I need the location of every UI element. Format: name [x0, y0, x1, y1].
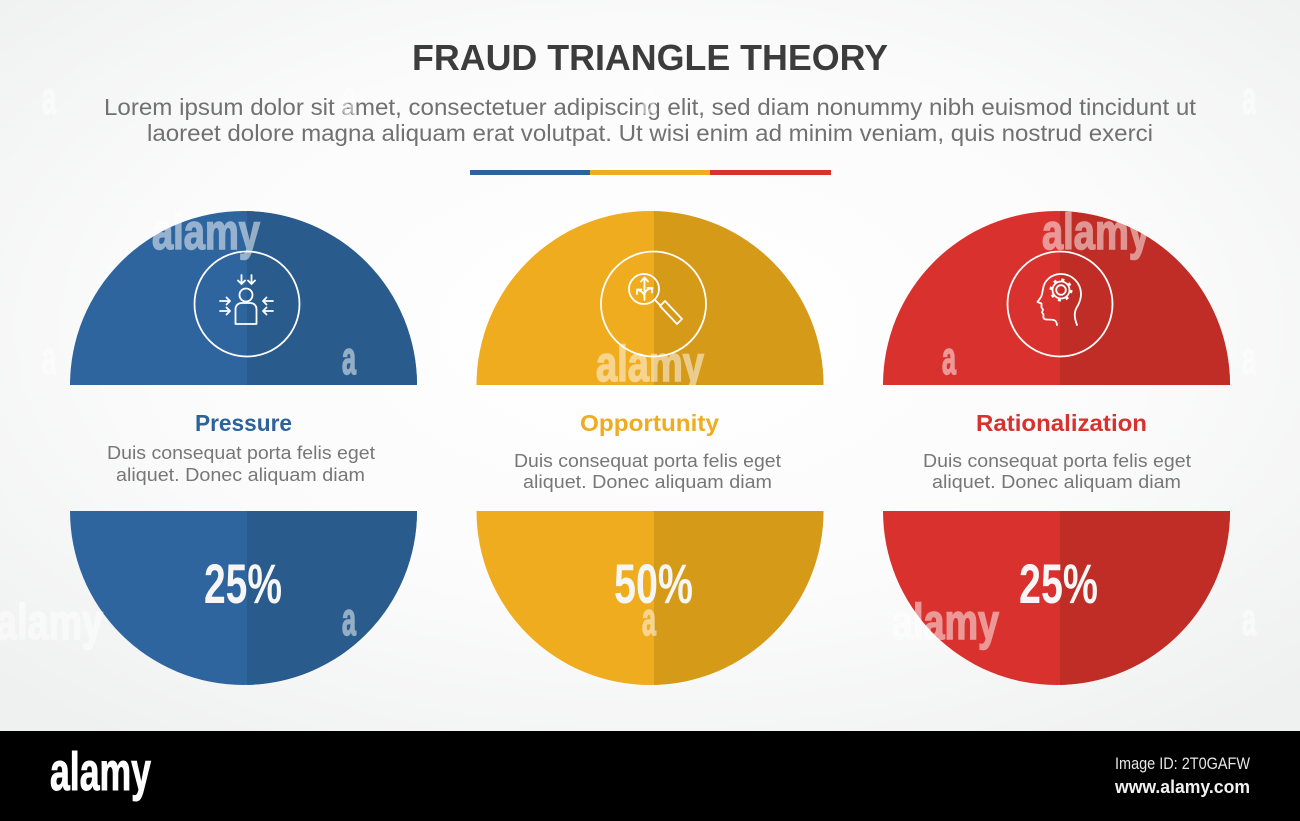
intro text: Lorem ipsum dolor sit amet, consectetuer adipiscing elit, sed diam nonummy nibh euismod tincidunt ut: [104, 94, 1197, 120]
watermarks: a: [42, 332, 56, 384]
watermarks: a: [1242, 593, 1256, 645]
description: pressure: Duis consequat porta felis eget: [107, 443, 375, 463]
description: pressure: aliquet. Donec aliquam diam: [116, 465, 365, 485]
watermarks: a: [1242, 332, 1256, 384]
watermarks: a: [1242, 72, 1256, 124]
top half circle: opportunity: [476, 211, 824, 385]
description: rationalization: Duis consequat porta felis eget: [923, 451, 1191, 471]
bottom half circle: pressure: [70, 511, 417, 685]
watermarks: alamy: [152, 204, 260, 260]
tricolor divider: [470, 170, 831, 175]
image id: Image ID: 2T0GAFW: [1115, 754, 1250, 773]
watermarks: [0, 72, 1256, 650]
intro text: laoreet dolore magna aliquam erat volutpat. Ut wisi enim ad minim veniam, quis nostrud exerci: [147, 120, 1153, 146]
icon: person under pressure: [194, 252, 300, 356]
watermarks: a: [342, 72, 356, 124]
description: rationalization: aliquet. Donec aliquam diam: [932, 472, 1181, 492]
bottom half circle: rationalization: [883, 511, 1230, 685]
top half circle: pressure: [70, 211, 417, 385]
value: 25%: 25%: [1019, 552, 1098, 615]
panel: pressure: [70, 211, 417, 685]
bottom half circle: opportunity: [476, 511, 824, 685]
footer logo: alamy: [50, 742, 151, 802]
title: FRAUD TRIANGLE THEORY: [412, 37, 888, 78]
watermarks: a: [342, 332, 356, 384]
description: opportunity: aliquet. Donec aliquam diam: [523, 472, 772, 492]
value: 50%: 50%: [614, 552, 693, 615]
watermarks: a: [642, 593, 656, 645]
watermarks: a: [942, 332, 956, 384]
heading: rationalization: Rationalization: [976, 410, 1147, 436]
watermarks: alamy: [0, 594, 103, 650]
watermarks: alamy: [596, 336, 704, 392]
description: rationalization: [923, 451, 1191, 492]
description: opportunity: [514, 451, 781, 492]
value: 25%: 25%: [204, 552, 282, 615]
description: pressure: [107, 443, 375, 485]
top half circle: rationalization: [883, 211, 1230, 385]
heading: opportunity: Opportunity: [580, 410, 719, 436]
website: www.alamy.com: [1114, 777, 1250, 797]
panel: opportunity: [476, 211, 824, 685]
watermarks: a: [342, 593, 356, 645]
panel: rationalization: [883, 211, 1230, 685]
heading: pressure: Pressure: [195, 410, 292, 436]
intro text: [104, 94, 1197, 146]
watermarks: alamy: [892, 594, 999, 650]
watermarks: alamy: [1042, 204, 1150, 260]
description: opportunity: Duis consequat porta felis eget: [514, 451, 781, 471]
icon: magnifier with arrows: [601, 252, 706, 356]
watermarks: a: [642, 72, 656, 124]
footer bar: [0, 731, 1300, 821]
watermarks: a: [42, 72, 56, 124]
icon: head with gear: [1008, 252, 1112, 356]
